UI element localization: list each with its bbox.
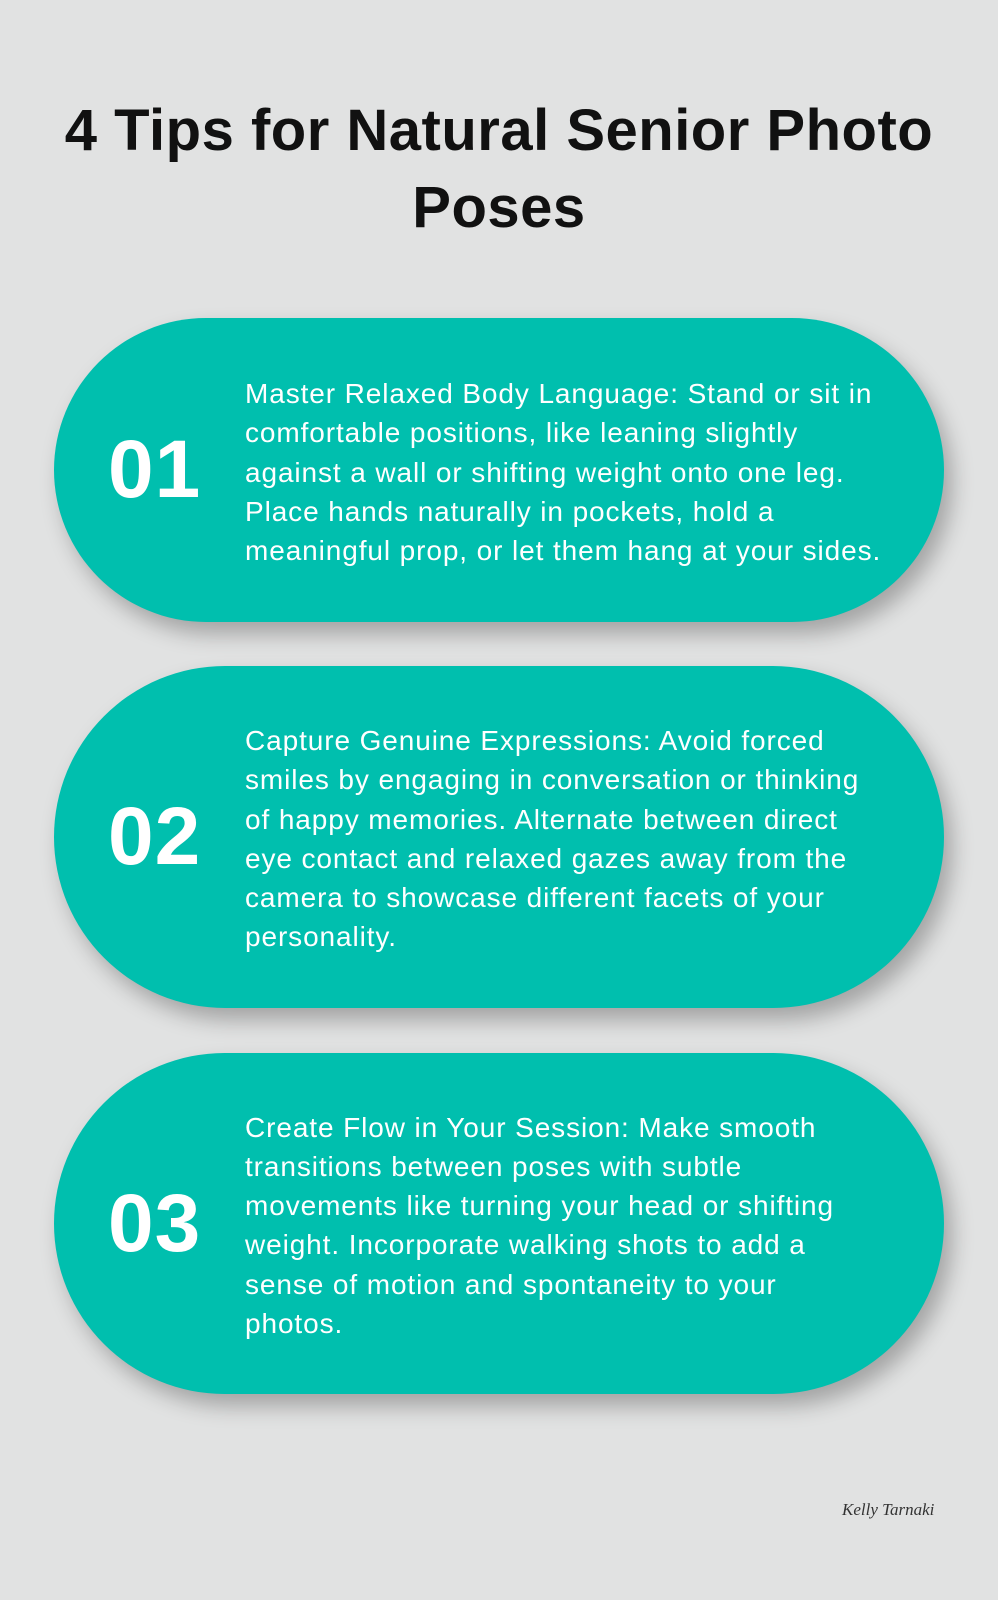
text: tip 01: meaningful prop, or let them hang at your sides. xyxy=(245,535,881,566)
text: tip 03: weight. Incorporate walking shots to add a xyxy=(245,1230,806,1260)
text: tip 02 xyxy=(245,725,859,953)
text: tip 03: Create Flow in Your Session: Make smooth xyxy=(245,1112,816,1143)
text: tip 02: camera to showcase different facets of your xyxy=(245,882,825,913)
panel: tip 03 xyxy=(54,1053,944,1394)
title: 4 Tips for Natural Senior Photo xyxy=(65,98,933,163)
text: tip 02: smiles by engaging in conversation or thinking xyxy=(245,764,859,795)
logo: Kelly Tarnaki xyxy=(842,1500,934,1519)
text: tip 03 xyxy=(245,1112,834,1339)
text: tip 03: movements like turning your head or shifting xyxy=(245,1190,834,1221)
text: tip 02: eye contact and relaxed gazes away from the xyxy=(245,843,847,874)
text: tip 01: Master Relaxed Body Language: Stand or sit in xyxy=(245,378,872,409)
text: tip 02: Capture Genuine Expressions: Avoid forced xyxy=(245,725,825,756)
text: tip 01: comfortable positions, like leaning slightly xyxy=(245,417,798,448)
text: tip 03: transitions between poses with subtle xyxy=(245,1151,742,1182)
text: tip 01 xyxy=(245,378,881,566)
text: tip 03: photos. xyxy=(245,1308,343,1339)
number 02: 02 xyxy=(108,791,201,882)
text: tip 01: against a wall or shifting weight onto one leg. xyxy=(245,456,845,487)
text: tip 01: Place hands naturally in pockets, hold a xyxy=(245,496,774,527)
number 03: 03 xyxy=(108,1178,201,1268)
text: tip 02: of happy memories. Alternate between direct xyxy=(245,804,838,835)
title: Poses xyxy=(412,175,586,240)
text: tip 02: personality. xyxy=(245,922,397,953)
text: tip 03: sense of motion and spontaneity to your xyxy=(245,1269,777,1300)
title xyxy=(65,98,933,240)
number 01: 01 xyxy=(108,424,201,515)
panel: tip 02 xyxy=(54,666,944,1008)
panel: tip 01 xyxy=(54,318,944,622)
